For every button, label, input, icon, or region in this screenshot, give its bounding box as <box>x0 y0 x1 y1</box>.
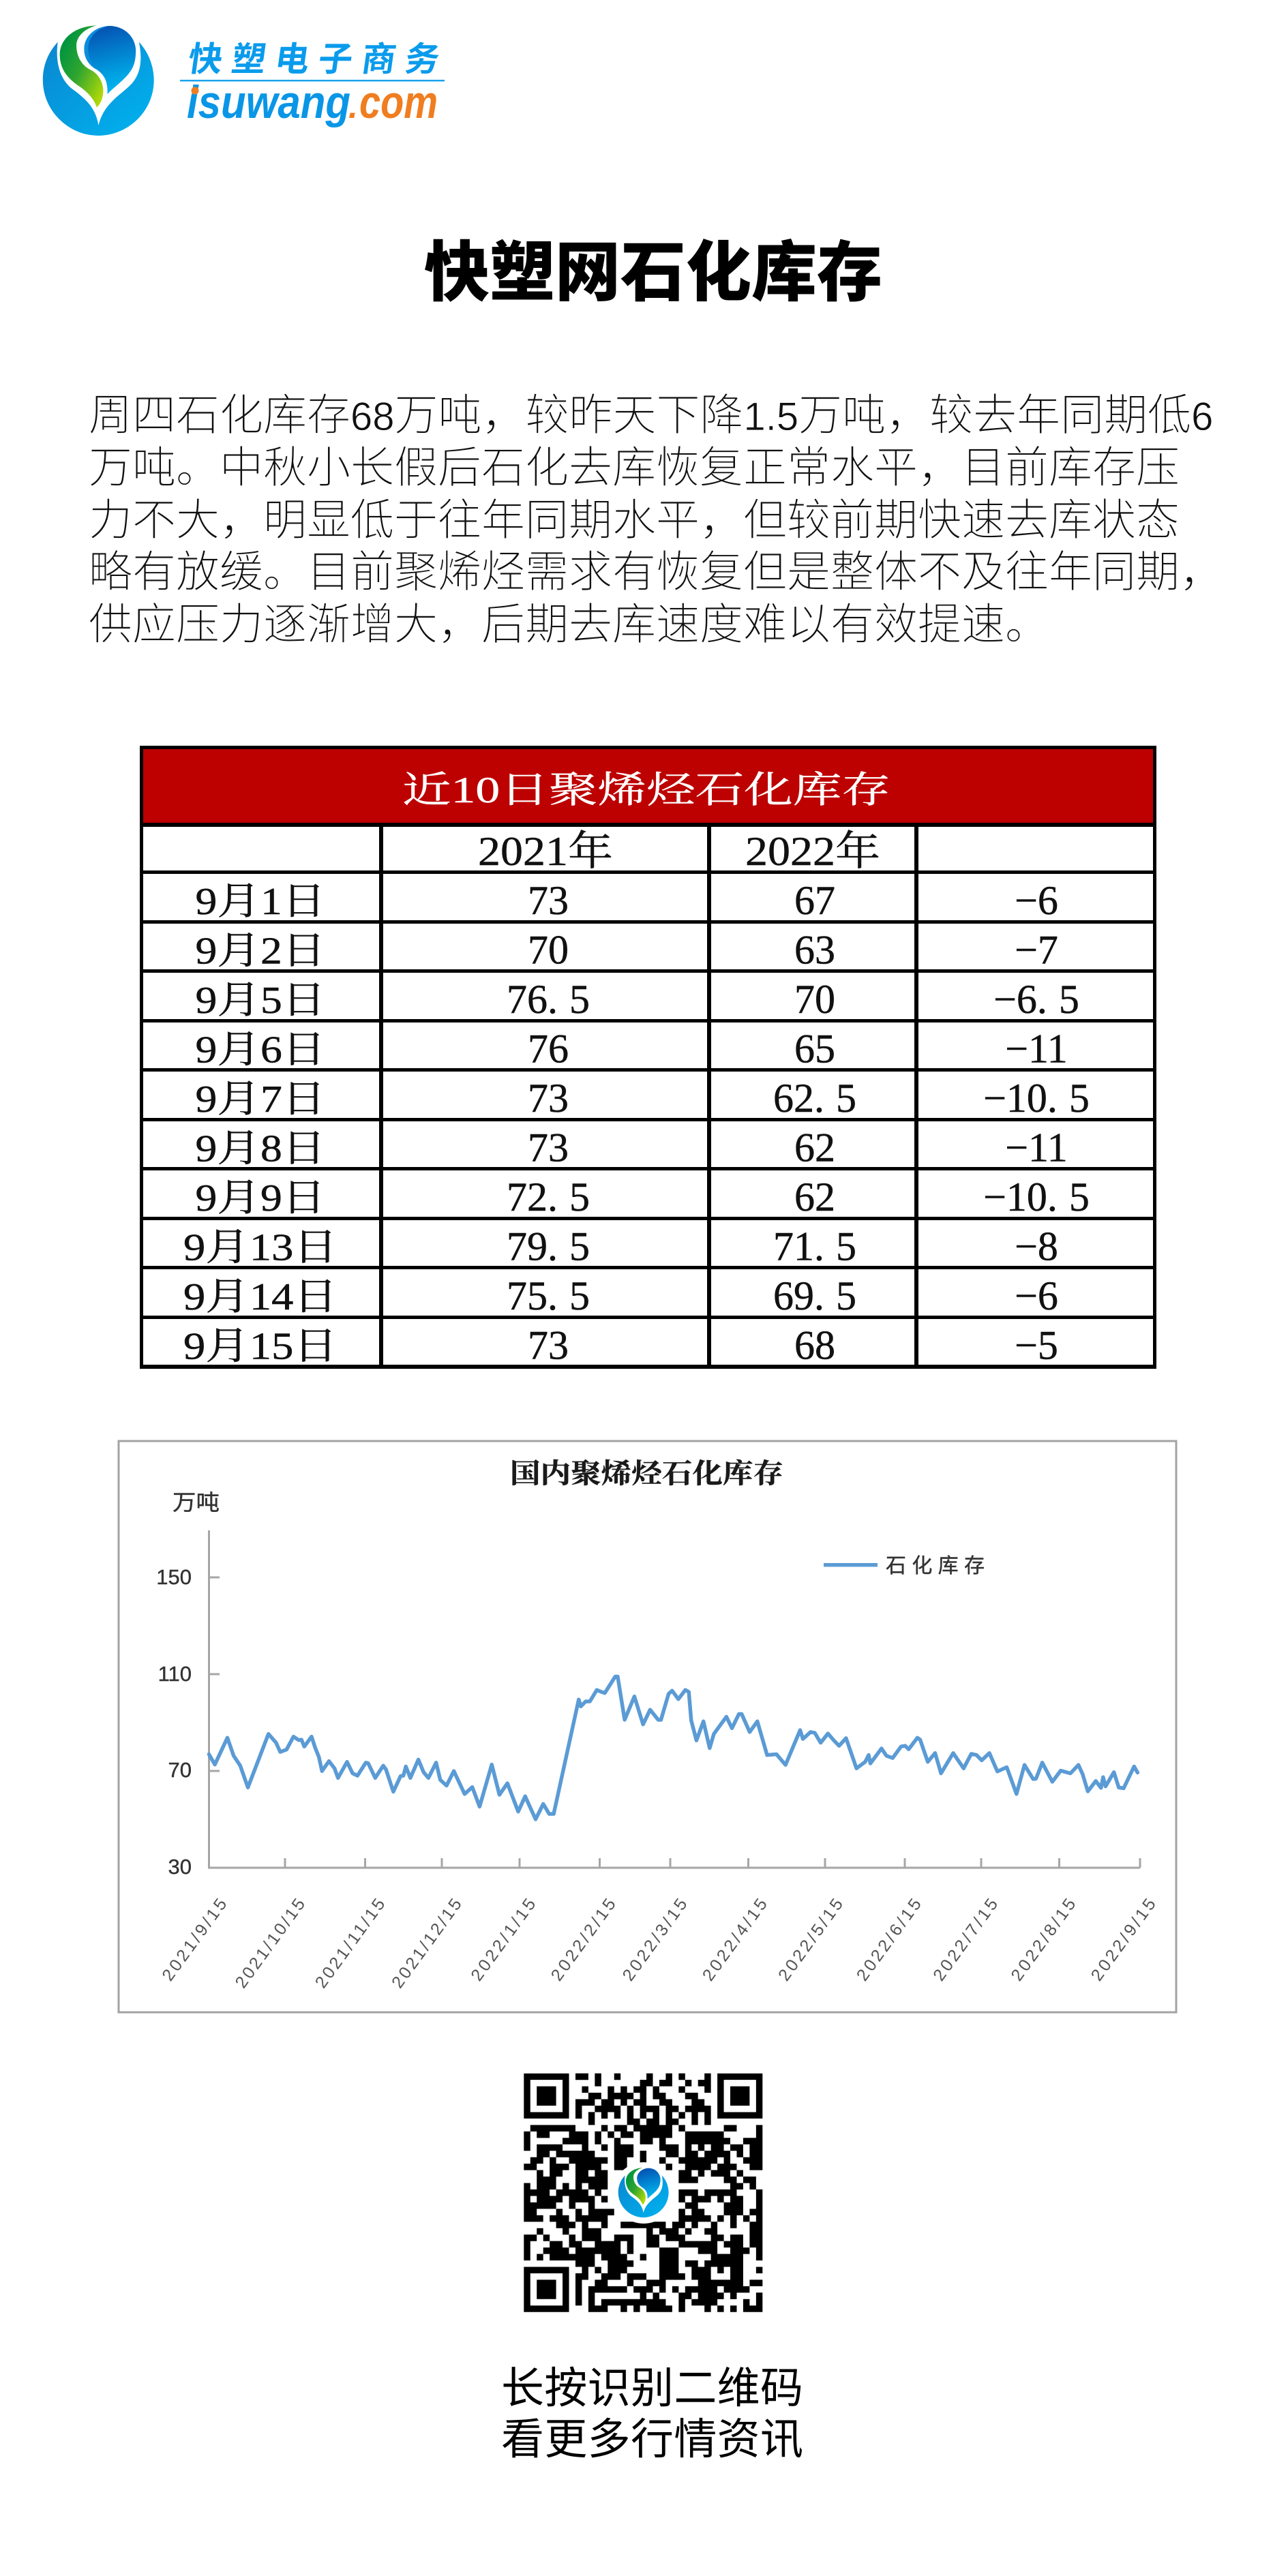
QR caption <box>501 2365 803 2464</box>
table header row: 2022年 <box>745 829 880 874</box>
row 9月1日: 67 <box>794 878 835 923</box>
row 9月6日: 65 <box>794 1027 835 1072</box>
chart title: 国内聚烯烃石化库存 <box>510 1458 783 1489</box>
row 9月9日 <box>195 1175 1090 1219</box>
row 9月2日: −7 <box>1015 927 1058 972</box>
logo domain: . <box>348 87 358 125</box>
row 9月9日: 9月9日 <box>195 1177 326 1219</box>
row 9月9日: 72. 5 <box>507 1175 590 1219</box>
legend: 石化库存 <box>886 1555 985 1577</box>
icon: QR centre logo <box>613 2162 674 2224</box>
row 9月9日: −10. 5 <box>983 1175 1090 1219</box>
x axis date labels: 2022/6/15 <box>853 1895 925 1984</box>
x axis date labels: 2022/9/15 <box>1088 1895 1160 1984</box>
body text block: 略有放缓。目前聚烯烃需求有恢复但是整体不及往年同期， <box>89 547 1223 596</box>
row 9月7日: 73 <box>528 1076 569 1121</box>
row 9月13日 <box>183 1224 1058 1269</box>
row 9月8日 <box>195 1125 1068 1170</box>
title: 快塑网石化库存 <box>424 237 882 309</box>
row 9月2日 <box>195 927 1058 972</box>
row 9月1日: 73 <box>528 878 569 923</box>
row 9月13日: −8 <box>1015 1224 1058 1269</box>
legend <box>824 1555 985 1577</box>
body text block: 万吨。中秋小长假后石化去库恢复正常水平，目前库存压 <box>89 443 1180 492</box>
row 9月15日: 9月15日 <box>183 1325 338 1367</box>
row 9月13日: 79. 5 <box>507 1224 590 1269</box>
row 9月8日: −11 <box>1005 1125 1068 1170</box>
QR code <box>524 2076 762 2309</box>
table title banner: 近10日聚烯烃石化库存 <box>402 770 890 810</box>
logo rule <box>180 80 445 82</box>
row 9月8日: 73 <box>528 1125 569 1170</box>
y axis labels: 110 <box>158 1662 192 1686</box>
x axis date labels: 2022/8/15 <box>1007 1895 1079 1984</box>
table header row: 2021年 <box>478 829 613 874</box>
table header row <box>478 829 880 874</box>
line chart panel <box>119 1441 1176 2012</box>
x axis date labels <box>158 1895 1160 1992</box>
row 9月6日: 76 <box>528 1027 569 1072</box>
row 9月5日: −6. 5 <box>993 977 1079 1022</box>
y axis labels: 70 <box>168 1758 192 1782</box>
row 9月14日: −6 <box>1015 1273 1058 1318</box>
row 9月14日: 75. 5 <box>507 1273 590 1318</box>
QR caption: 长按识别二维码 <box>501 2365 803 2412</box>
x axis date labels: 2021/10/15 <box>231 1895 309 1992</box>
row 9月13日: 9月13日 <box>183 1227 338 1269</box>
row 9月1日 <box>195 878 1058 923</box>
row 9月2日: 70 <box>528 927 569 972</box>
row 9月6日: 9月6日 <box>195 1029 326 1072</box>
axes and ticks <box>209 1530 1140 1868</box>
row 9月2日: 63 <box>794 927 835 972</box>
row 9月1日: −6 <box>1015 878 1058 923</box>
body text block <box>89 391 1223 649</box>
row 9月14日: 69. 5 <box>773 1273 856 1318</box>
x axis date labels: 2022/4/15 <box>699 1895 771 1984</box>
row 9月1日: 9月1日 <box>195 881 326 923</box>
row 9月8日: 9月8日 <box>195 1127 326 1170</box>
row 9月15日: 68 <box>794 1322 835 1367</box>
row 9月5日: 9月5日 <box>195 980 326 1022</box>
x axis date labels: 2021/12/15 <box>388 1895 466 1992</box>
row 9月2日: 9月2日 <box>195 930 326 972</box>
inventory trend line <box>209 1677 1137 1819</box>
body text block: 周四石化库存68万吨，较昨天下降1.5万吨，较去年同期低6 <box>89 391 1213 440</box>
x axis date labels: 2022/5/15 <box>775 1895 847 1984</box>
row 9月5日: 70 <box>794 977 835 1022</box>
row 9月5日: 76. 5 <box>507 977 590 1022</box>
logo Chinese name: 快塑电子商务 <box>185 40 442 78</box>
x axis date labels: 2022/3/15 <box>618 1895 691 1984</box>
row 9月15日: 73 <box>528 1322 569 1367</box>
row 9月14日: 9月14日 <box>183 1276 338 1318</box>
body text block: 力不大，明显低于往年同期水平，但较前期快速去库状态 <box>89 496 1180 545</box>
row 9月7日: 9月7日 <box>195 1078 326 1121</box>
row 9月7日: 62. 5 <box>773 1076 856 1121</box>
row 9月9日: 62 <box>794 1175 835 1219</box>
y axis unit: 万吨 <box>173 1490 220 1515</box>
logo domain: isuwang <box>187 76 350 128</box>
y axis labels <box>156 1565 192 1879</box>
row 9月6日: −11 <box>1005 1027 1068 1072</box>
row 9月15日: −5 <box>1015 1322 1058 1367</box>
x axis date labels: 2021/11/15 <box>312 1895 389 1992</box>
row 9月15日 <box>183 1322 1058 1367</box>
x axis date labels: 2022/1/15 <box>467 1895 539 1984</box>
logo domain: com <box>359 76 438 128</box>
body text block: 供应压力逐渐增大，后期去库速度难以有效提速。 <box>89 600 1049 649</box>
brand logo <box>43 25 445 136</box>
row 9月14日 <box>183 1273 1058 1318</box>
x axis date labels: 2022/2/15 <box>548 1895 620 1984</box>
y axis labels: 30 <box>168 1855 192 1879</box>
x axis date labels: 2021/9/15 <box>158 1895 230 1984</box>
table title banner <box>141 748 1155 824</box>
row 9月6日 <box>195 1027 1068 1072</box>
QR caption: 看更多行情资讯 <box>501 2416 803 2464</box>
y axis labels: 150 <box>156 1565 192 1589</box>
row 9月7日 <box>195 1076 1090 1121</box>
inventory table <box>140 746 1156 1369</box>
row 9月7日: −10. 5 <box>983 1076 1090 1121</box>
x axis date labels: 2022/7/15 <box>929 1895 1002 1984</box>
row 9月5日 <box>195 977 1079 1022</box>
row 9月8日: 62 <box>794 1125 835 1170</box>
icon: isuwang droplet emblem <box>43 25 154 136</box>
row 9月13日: 71. 5 <box>773 1224 856 1269</box>
